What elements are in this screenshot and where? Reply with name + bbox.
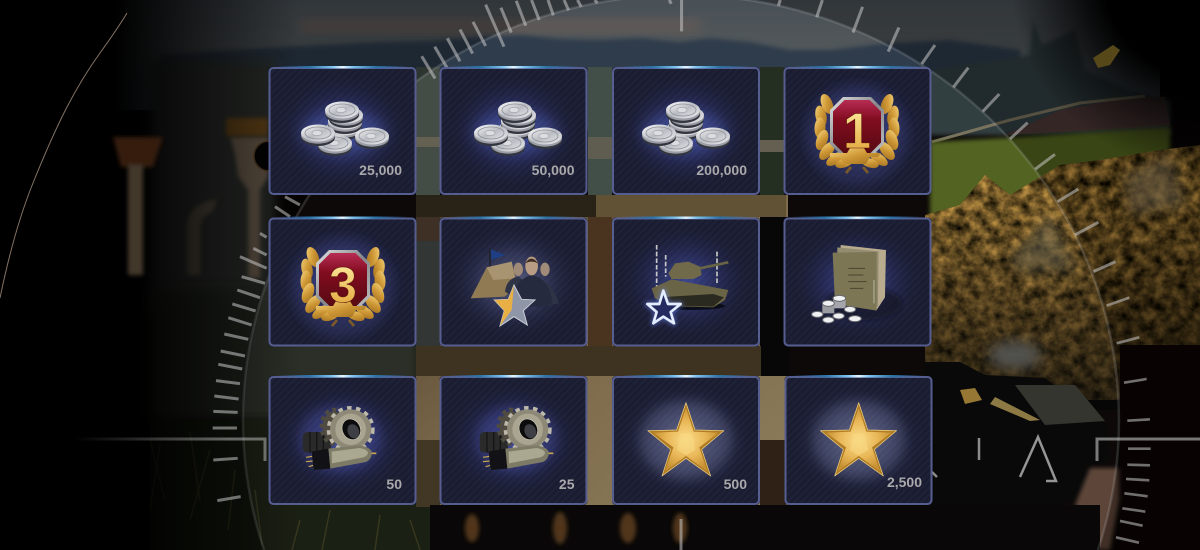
icon: crew, map, flag and star xyxy=(471,248,559,326)
left hillside xyxy=(150,60,275,310)
partial chevron xyxy=(932,472,937,477)
yellow leaves top right xyxy=(1093,45,1120,68)
card: 200,000 credits xyxy=(612,66,760,195)
amount: 25,000 xyxy=(359,162,402,178)
card frame xyxy=(784,216,932,346)
card frame xyxy=(612,66,760,195)
amount: 500 xyxy=(724,476,747,492)
card: 25,000 credits xyxy=(268,66,416,195)
sunlit ground behind the tank xyxy=(1075,468,1119,550)
sky xyxy=(100,0,1160,110)
vignette top right xyxy=(900,0,1200,300)
card frame xyxy=(440,216,588,346)
amount: 50 xyxy=(386,476,402,492)
card: tank with star xyxy=(612,216,760,346)
medal numeral: 3 xyxy=(329,257,357,313)
foreground grass xyxy=(150,432,420,550)
card: 50,000 credits xyxy=(440,66,588,195)
right crosshair bracket xyxy=(1097,439,1200,461)
hills and fields on the right xyxy=(930,18,1170,135)
icon: silver coins xyxy=(472,102,562,156)
card frame xyxy=(268,216,416,346)
small vertical mark xyxy=(978,438,980,460)
icon: gold star xyxy=(812,400,905,480)
tank rear silhouette xyxy=(925,362,1110,550)
amount: 25 xyxy=(559,476,575,492)
card frame xyxy=(440,375,588,505)
icon: laurel medal xyxy=(807,85,907,185)
icon: gear and vacuum tube xyxy=(298,405,382,472)
left crosshair bracket xyxy=(75,439,265,461)
card frame xyxy=(784,66,932,195)
icon: gold star xyxy=(639,400,733,480)
card frame xyxy=(784,375,932,505)
card frame xyxy=(268,375,416,505)
pale rock faces xyxy=(1010,155,1185,272)
amount: 50,000 xyxy=(532,162,575,178)
icon: silver coins xyxy=(299,102,389,156)
icon: laurel medal xyxy=(293,238,393,338)
card: 2,500 gold xyxy=(784,375,932,505)
bottom tracks xyxy=(430,505,1100,550)
card frame xyxy=(612,375,760,505)
icon: gear and vacuum tube xyxy=(475,405,559,472)
card frame xyxy=(612,216,760,346)
smoke puff xyxy=(989,341,1041,369)
card: 50 spare parts xyxy=(268,375,416,505)
medal numeral: 1 xyxy=(843,103,871,159)
central tank hull xyxy=(416,195,788,507)
icon: folders and silver coins xyxy=(812,245,902,323)
viaduct arches xyxy=(187,199,217,275)
gun muzzle xyxy=(254,141,284,171)
cliff shading xyxy=(925,210,1200,410)
card: crew and map with star xyxy=(440,216,588,346)
amount: 200,000 xyxy=(696,162,747,178)
card: tier 1 medal xyxy=(784,66,932,195)
card: documents and coins xyxy=(784,216,932,346)
outer thin arc xyxy=(0,13,127,298)
vignette left xyxy=(0,0,300,550)
pink cloud band xyxy=(300,20,700,32)
icon: tank and silver star xyxy=(647,245,728,323)
card: 25 spare parts xyxy=(440,375,588,505)
right side darkness xyxy=(1120,345,1200,550)
card frame xyxy=(440,66,588,195)
range ticks xyxy=(213,0,1151,550)
lens edge xyxy=(243,0,1119,550)
card: tier 3 medal xyxy=(268,216,416,346)
chevron marker xyxy=(1020,437,1056,481)
distant tree line xyxy=(160,35,1020,130)
distant arch in the shadow xyxy=(113,137,163,275)
card frame xyxy=(268,66,416,195)
card: 500 gold xyxy=(612,375,760,505)
rocky cliff xyxy=(925,145,1200,400)
icon: silver coins xyxy=(640,102,730,156)
amount: 2,500 xyxy=(887,474,922,490)
